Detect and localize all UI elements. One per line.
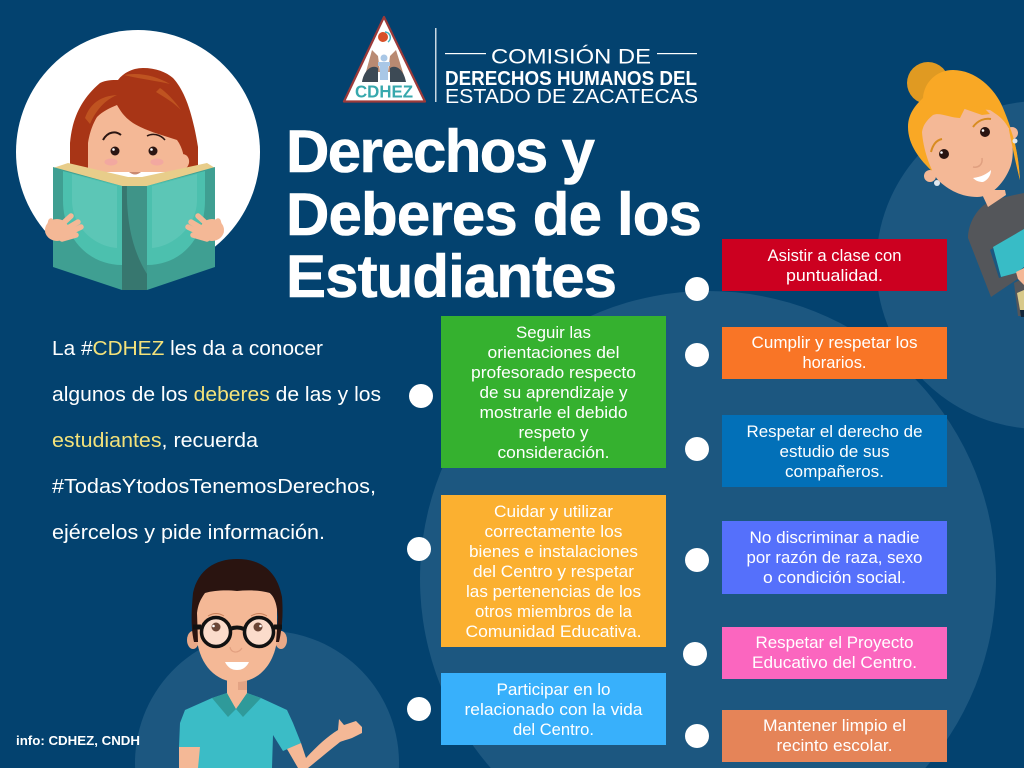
illustration: woman with book bbox=[907, 62, 1024, 317]
item: participar: relacionado con la vida bbox=[464, 700, 643, 719]
item: cuidar los bienes: las pertenencias de los bbox=[466, 582, 641, 601]
intro paragraph: La #CDHEZ les da a conocer bbox=[52, 337, 323, 360]
item: seguir las orientaciones: profesorado respecto bbox=[471, 363, 636, 382]
logo wordmark: COMISIÓN DE bbox=[491, 44, 651, 68]
hair bbox=[70, 68, 198, 172]
item: seguir las orientaciones: orientaciones del bbox=[488, 343, 620, 362]
item: cuidar los bienes: Comunidad Educativa. bbox=[466, 622, 642, 641]
intro paragraph bbox=[52, 337, 381, 544]
face bbox=[922, 108, 1013, 197]
neck bbox=[980, 190, 1006, 207]
item: no discriminar: No discriminar a nadie bbox=[750, 528, 920, 547]
logo wordmark bbox=[445, 44, 698, 108]
face bbox=[88, 105, 186, 172]
title: Estudiantes bbox=[286, 243, 617, 310]
source note: info: CDHEZ, CNDH bbox=[16, 734, 140, 748]
logo wordmark: ESTADO DE ZACATECAS bbox=[445, 86, 698, 108]
hair bbox=[908, 70, 1020, 180]
book bbox=[53, 163, 215, 186]
title: Derechos y bbox=[286, 118, 596, 185]
item: seguir las orientaciones bbox=[409, 316, 666, 468]
item: participar: Participar en lo bbox=[496, 680, 610, 699]
item: horarios bbox=[685, 327, 947, 379]
intro paragraph: ejércelos y pide información. bbox=[52, 521, 325, 544]
item: participar: del Centro. bbox=[513, 720, 594, 739]
item: seguir las orientaciones: consideración. bbox=[498, 443, 610, 462]
right column items bbox=[683, 239, 947, 762]
title bbox=[286, 118, 702, 310]
body bbox=[968, 193, 1024, 297]
intro paragraph: #TodasYtodosTenemosDerechos, bbox=[52, 475, 376, 498]
item: horarios: horarios. bbox=[802, 353, 866, 372]
item: puntualidad: puntualidad. bbox=[786, 266, 883, 285]
neck bbox=[227, 676, 247, 706]
item: no discriminar bbox=[685, 521, 947, 594]
item: cuidar los bienes: del Centro y respetar bbox=[473, 562, 634, 581]
item: cuidar los bienes: otros miembros de la bbox=[475, 602, 633, 621]
item: proyecto educativo bbox=[683, 627, 947, 679]
item: seguir las orientaciones: Seguir las bbox=[516, 323, 591, 342]
item: derecho de estudio: estudio de sus bbox=[780, 442, 890, 461]
illustration: boy with glasses bbox=[179, 559, 362, 768]
item: proyecto educativo: Respetar el Proyecto bbox=[756, 633, 914, 652]
item: seguir las orientaciones: mostrarle el debido bbox=[480, 403, 628, 422]
item: seguir las orientaciones: de su aprendizaje y bbox=[480, 383, 628, 402]
logo wordmark: DERECHOS HUMANOS DEL bbox=[445, 68, 697, 90]
item: proyecto educativo: Educativo del Centro. bbox=[752, 653, 917, 672]
shirt bbox=[179, 693, 301, 768]
item: seguir las orientaciones: respeto y bbox=[518, 423, 589, 442]
logo triangle bbox=[344, 17, 425, 102]
item: cuidar los bienes: correctamente los bbox=[484, 522, 622, 541]
intro paragraph: estudiantes, recuerda bbox=[52, 429, 259, 452]
logo triangle: CDHEZ bbox=[355, 82, 413, 102]
arms bbox=[179, 747, 200, 768]
item: puntualidad: Asistir a clase con bbox=[768, 246, 902, 265]
intro paragraph: algunos de los deberes de las y los bbox=[52, 383, 381, 406]
item: no discriminar: o condición social. bbox=[763, 568, 906, 587]
hand left bbox=[45, 216, 81, 241]
item: horarios: Cumplir y respetar los bbox=[752, 333, 918, 352]
title: Deberes de los bbox=[286, 181, 702, 248]
bun bbox=[907, 62, 949, 104]
item: derecho de estudio bbox=[685, 415, 947, 487]
logo: CDHEZ bbox=[344, 17, 698, 108]
illustration: girl reading a book bbox=[16, 30, 260, 290]
hand right bbox=[188, 216, 224, 241]
item: recinto limpio: Mantener limpio el bbox=[763, 716, 906, 735]
item: derecho de estudio: Respetar el derecho de bbox=[746, 422, 922, 441]
ears bbox=[924, 170, 936, 182]
item: participar bbox=[407, 673, 666, 745]
item: recinto limpio bbox=[685, 710, 947, 762]
item: cuidar los bienes: Cuidar y utilizar bbox=[494, 502, 613, 521]
item: no discriminar: por razón de raza, sexo bbox=[746, 548, 922, 567]
left column items bbox=[407, 316, 666, 745]
item: cuidar los bienes: bienes e instalaciones bbox=[469, 542, 638, 561]
item: derecho de estudio: compañeros. bbox=[785, 462, 884, 481]
item: recinto limpio: recinto escolar. bbox=[776, 736, 892, 755]
item: cuidar los bienes bbox=[407, 495, 666, 647]
head bbox=[187, 631, 199, 649]
item: puntualidad bbox=[685, 239, 947, 301]
hair bbox=[192, 559, 283, 642]
eyes bbox=[110, 146, 120, 156]
glasses bbox=[202, 618, 230, 646]
